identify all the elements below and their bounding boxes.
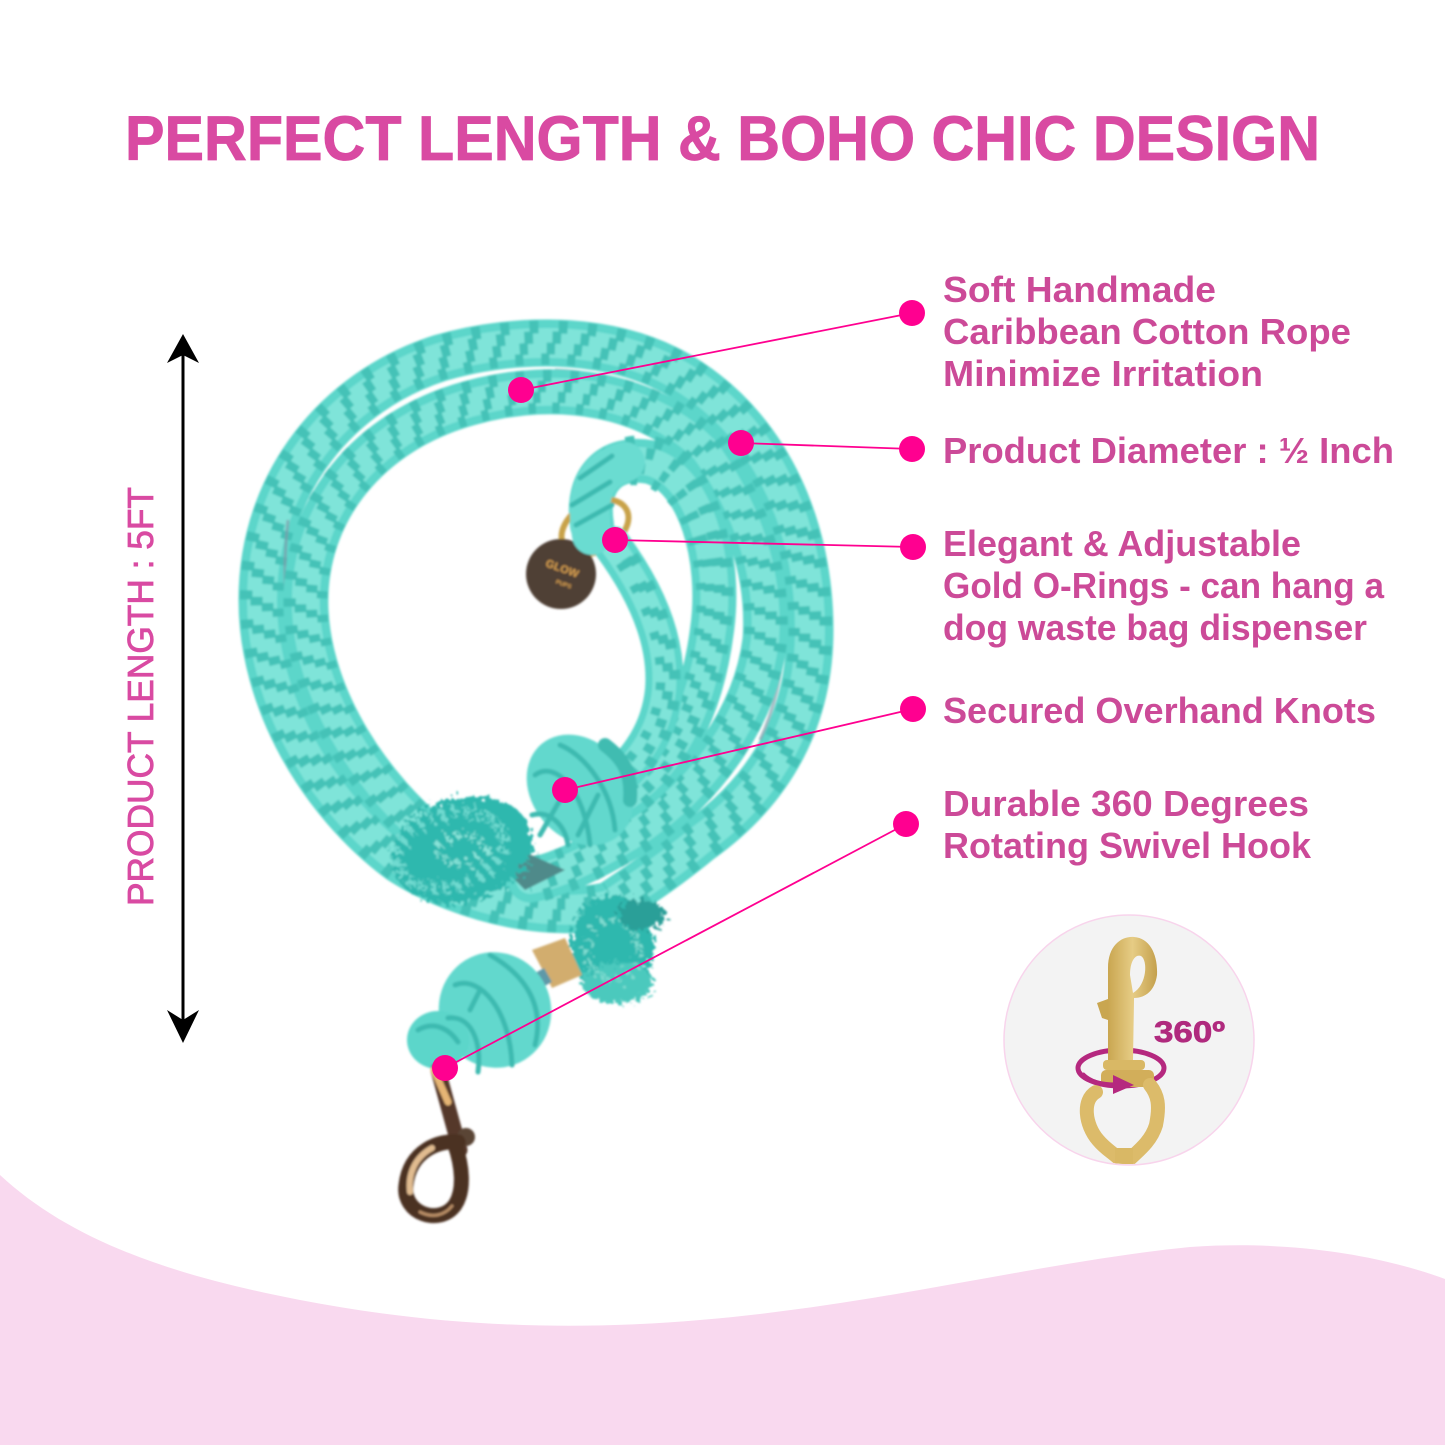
knot 1 — [505, 713, 655, 867]
knot 2 — [407, 936, 567, 1084]
snap hook — [406, 1070, 475, 1216]
inset: 360 degree swivel hook — [1004, 915, 1254, 1172]
text: o-rings description — [943, 523, 1385, 648]
text: rope description — [943, 269, 1351, 394]
o-ring and tag: PUPS — [555, 579, 572, 591]
inner rope ring — [290, 376, 782, 898]
text: swivel hook: Rotating Swivel Hook — [943, 825, 1312, 866]
text: o-rings description: Gold O-Rings - can hang a — [943, 565, 1385, 606]
text: diameter: Product Diameter : ½ Inch — [943, 430, 1394, 471]
handle rope end through ring — [609, 530, 675, 804]
background wave — [0, 1175, 1445, 1445]
shadow line between rings — [285, 370, 784, 740]
text: rope description: Caribbean Cotton Rope — [943, 311, 1351, 352]
inner handle loop — [590, 441, 728, 820]
o-ring and tag — [526, 488, 638, 609]
text: knots: Secured Overhand Knots — [943, 690, 1376, 731]
o-ring and tag: GLOW — [544, 558, 581, 581]
rotation arrow — [1082, 1074, 1134, 1094]
rotation ring — [1078, 1050, 1164, 1086]
text: rope description: Soft Handmade — [943, 269, 1216, 310]
gold ferrule — [532, 938, 582, 988]
tassel 2 — [570, 895, 666, 1003]
callout: rope — [508, 300, 925, 403]
text: swivel hook: Durable 360 Degrees — [943, 783, 1309, 824]
callout: diameter — [728, 430, 925, 462]
360 label: 360º — [1154, 1016, 1225, 1049]
handle top over ring — [590, 462, 625, 535]
leash photo illustration — [246, 327, 826, 1216]
product length label: PRODUCT LENGTH : 5FT — [120, 487, 161, 906]
text: o-rings description: dog waste bag dispenser — [943, 607, 1367, 648]
tassel 1 — [379, 781, 545, 919]
text: rope description: Minimize Irritation — [943, 353, 1263, 394]
gold swivel hook — [1087, 937, 1158, 1172]
callout: knots — [552, 696, 926, 803]
outer rope ring — [246, 327, 826, 927]
rope segment to lower knot — [530, 975, 548, 985]
arrow: product length — [167, 334, 199, 1043]
callout: swivel hook — [432, 811, 919, 1081]
text: o-rings description: Elegant & Adjustable — [943, 523, 1301, 564]
title: PERFECT LENGTH & BOHO CHIC DESIGN — [125, 104, 1320, 174]
dark gap near knot — [505, 850, 565, 890]
text: swivel hook — [943, 783, 1312, 866]
callout: o-rings — [602, 527, 926, 560]
